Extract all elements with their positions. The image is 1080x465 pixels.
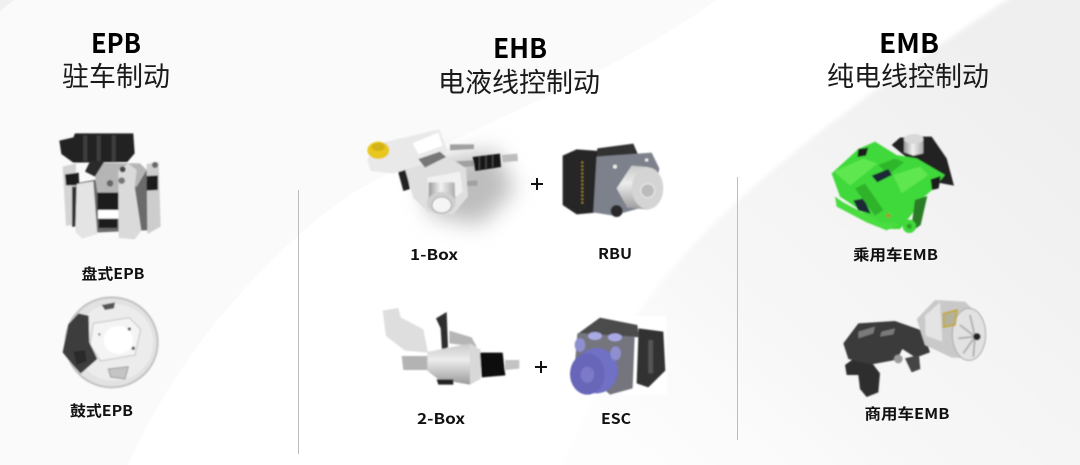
label: ESC: ESC — [601, 408, 631, 429]
icon: disc EPB caliper — [59, 133, 161, 239]
label: 2-Box: 2-Box — [417, 408, 466, 429]
background: right gray band — [555, 0, 1080, 465]
label: commercial vehicle EMB: 商用车EMB — [864, 403, 950, 424]
heading: EMB: EMB — [879, 22, 939, 61]
panel: EPB — [59, 22, 170, 421]
icon: 1-Box unit — [367, 129, 518, 214]
label: drum EPB: 鼓式EPB — [70, 400, 133, 421]
panel: EHB — [367, 27, 667, 429]
subheading: parking brake: 驻车制动 — [62, 62, 170, 92]
arrow: plus sign lower — [535, 361, 547, 373]
background: left swoosh — [0, 0, 716, 465]
label: RBU: RBU — [598, 243, 632, 264]
background: top-left corner — [0, 0, 14, 11]
label: passenger car EMB: 乘用车EMB — [853, 244, 938, 265]
icon: RBU module — [563, 144, 663, 217]
arrow: plus sign upper — [531, 178, 543, 190]
label: disc EPB: 盘式EPB — [82, 263, 144, 284]
icon: ESC module — [567, 316, 667, 395]
panel: EMB — [827, 22, 989, 424]
icon: passenger car EMB caliper — [832, 134, 954, 233]
subheading: electro-hydraulic brake by wire: 电液线控制动 — [438, 68, 600, 98]
heading: EPB: EPB — [91, 22, 141, 61]
icon: commercial vehicle EMB — [843, 300, 986, 397]
divider right — [737, 177, 738, 440]
icon: 2-Box unit — [383, 308, 519, 385]
shadow under 1-Box — [420, 150, 515, 225]
label: 1-Box: 1-Box — [410, 244, 459, 265]
icon: drum EPB — [63, 297, 158, 387]
subheading: pure electric brake by wire: 纯电线控制动 — [827, 62, 989, 92]
divider left — [298, 190, 299, 454]
heading: EHB: EHB — [493, 27, 547, 66]
